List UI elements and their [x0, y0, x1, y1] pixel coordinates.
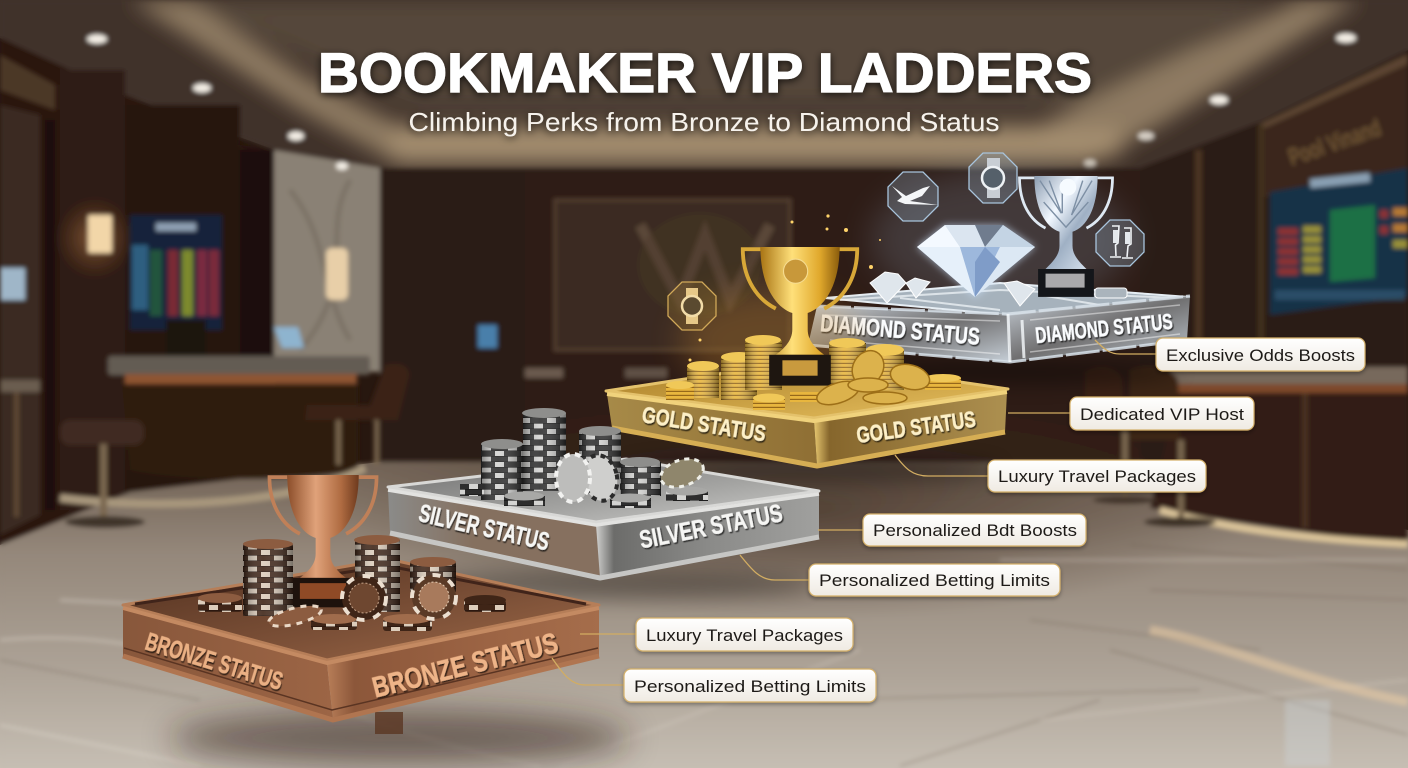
label: gold right face: GOLD STATUS [855, 406, 977, 448]
large diamond [917, 225, 1035, 297]
left screen [130, 215, 222, 330]
tier: gold [606, 214, 1008, 484]
label: silver left face: SILVER STATUS [416, 499, 552, 557]
coin stacks [666, 335, 961, 410]
perk: Personalized Betting Limits (bronze): Personalized Betting Limits [634, 677, 866, 696]
right counter [1150, 367, 1408, 545]
small diamonds [870, 272, 1127, 306]
perk: Luxury Travel Packages (gold) [988, 460, 1206, 492]
right screen [1270, 168, 1408, 315]
chip stacks [198, 535, 506, 631]
downlights [87, 34, 1356, 170]
floor reflections [1150, 630, 1408, 702]
perk: Luxury Travel Packages (bronze): Luxury Travel Packages [646, 626, 843, 645]
tier: silver [388, 408, 819, 599]
perk: Luxury Travel Packages (gold): Luxury Travel Packages [998, 467, 1196, 486]
perk: Luxury Travel Packages (bronze) [636, 618, 853, 651]
perk: Personalized Bdt Boosts [863, 514, 1086, 546]
bronze trophy [269, 475, 377, 607]
label: silver right face: SILVER STATUS [637, 499, 785, 555]
gold platform [606, 360, 1008, 484]
leader lines [552, 340, 1156, 685]
back wall [380, 168, 1150, 468]
right wall [1140, 50, 1408, 530]
diamond trophy [1020, 176, 1112, 297]
floating perk icon: champagne [1096, 220, 1144, 266]
label: diamond left face: DIAMOND STATUS [819, 310, 981, 351]
chip stacks [460, 408, 708, 508]
gold sparkles [688, 214, 881, 362]
perk: Exclusive Odds Boosts: Exclusive Odds Boosts [1166, 346, 1355, 365]
right chair by column [305, 364, 409, 465]
left table [0, 380, 40, 392]
tier: bronze [123, 475, 630, 766]
perk: Personalized Betting Limits (silver) [809, 564, 1060, 596]
left wall panels [0, 38, 275, 545]
label: diamond right face: DIAMOND STATUS [1034, 309, 1174, 348]
silver platform [388, 459, 819, 599]
floating perk icon: watch [969, 153, 1017, 203]
perk: Personalized Betting Limits (bronze) [624, 669, 876, 702]
left counter [60, 356, 370, 504]
bronze platform [123, 559, 630, 766]
counter items [166, 320, 206, 356]
label: gold left face: GOLD STATUS [640, 401, 768, 447]
gold trophy [743, 247, 857, 386]
tier: diamond [808, 153, 1190, 384]
sconces [55, 196, 135, 280]
floor [0, 462, 1408, 768]
perk: Exclusive Odds Boosts [1156, 338, 1365, 371]
right stools [1085, 366, 1216, 527]
marble veins [0, 545, 1408, 766]
loose coins [814, 345, 932, 409]
perk: Personalized Betting Limits (silver): Personalized Betting Limits [819, 571, 1050, 590]
subtitle: Climbing Perks from Bronze to Diamond Status [408, 107, 1000, 137]
logo panel [555, 200, 790, 350]
gold glow [680, 290, 860, 390]
title: BOOKMAKER VIP LADDERS [318, 41, 1092, 104]
left stool [60, 420, 145, 528]
label: bronze left face: BRONZE STATUS [142, 628, 286, 696]
perk: Personalized Bdt Boosts: Personalized Bdt Boosts [873, 521, 1077, 540]
label: bronze right face: BRONZE STATUS [369, 627, 561, 704]
ceiling [0, 0, 1408, 172]
marble column [274, 150, 380, 372]
perk: Dedicated VIP Host [1070, 397, 1254, 430]
diamond halo [870, 170, 1130, 310]
floating perk icon: watch [668, 282, 716, 330]
diamond platform [808, 283, 1190, 384]
floating perk icon: plane [888, 172, 938, 221]
perk: Dedicated VIP Host: Dedicated VIP Host [1080, 405, 1244, 424]
ceiling cove light [130, 0, 1360, 165]
